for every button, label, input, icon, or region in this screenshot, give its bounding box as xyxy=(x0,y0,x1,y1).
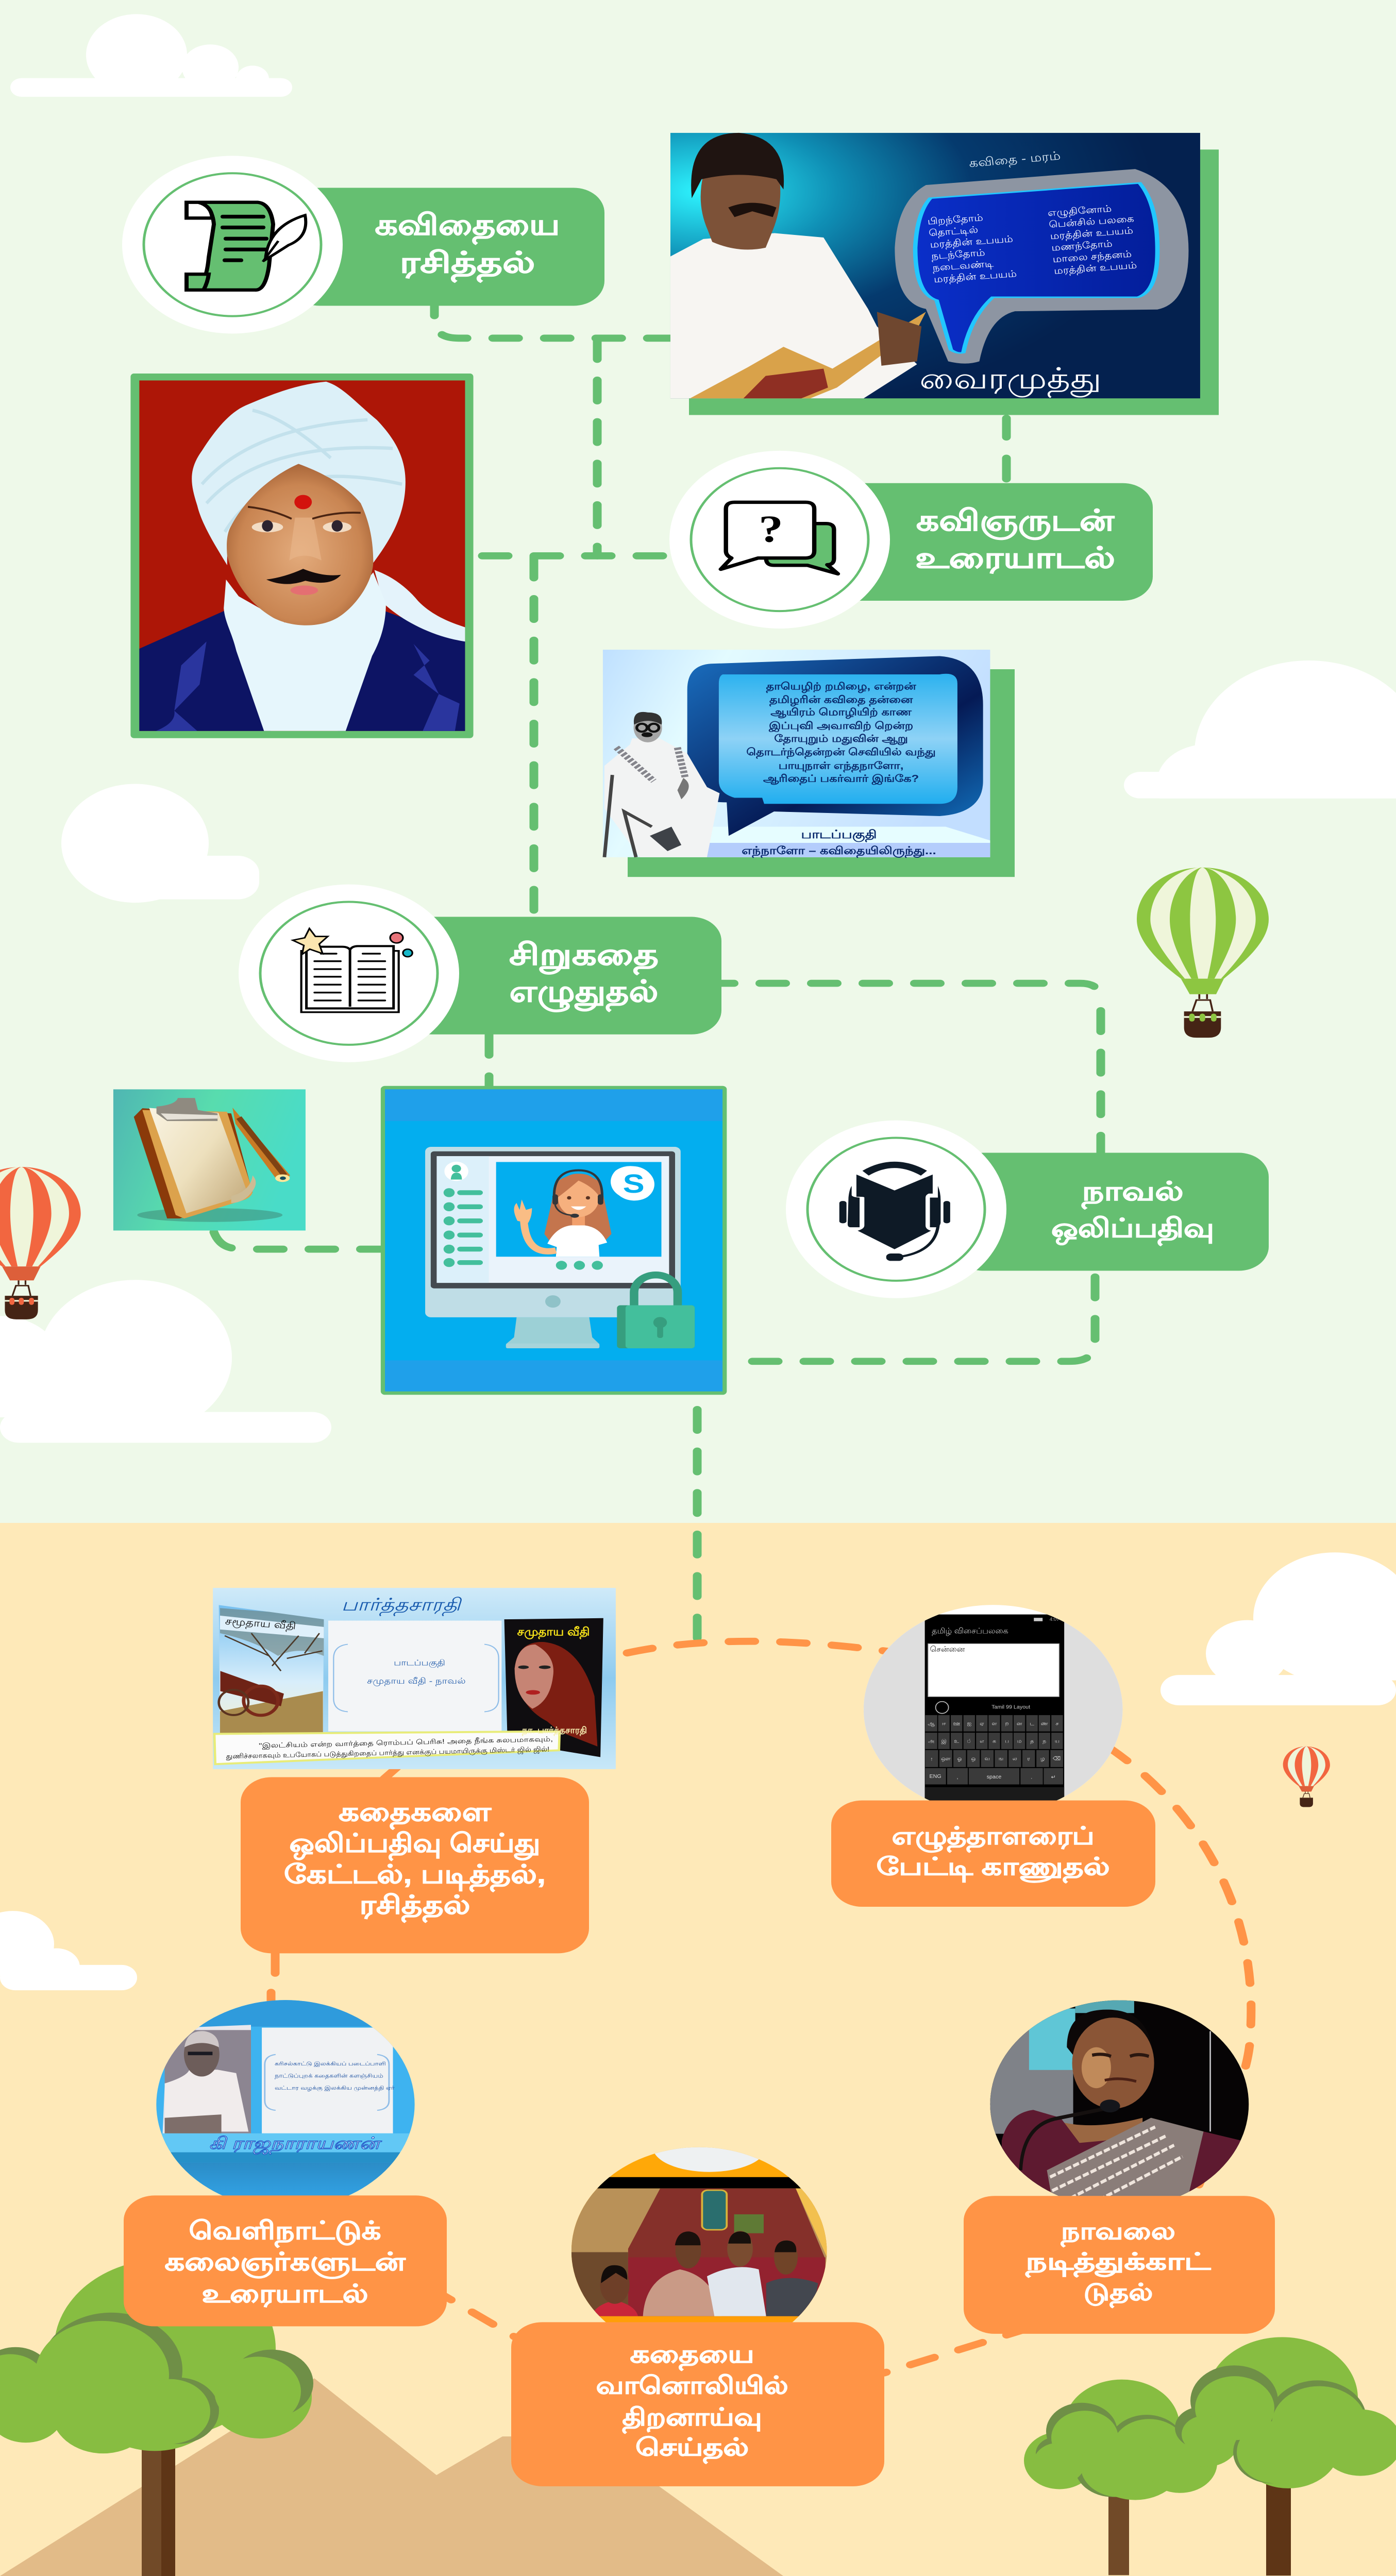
panel: phone with Tamil keyboard: ர xyxy=(1027,1756,1030,1762)
right book cover xyxy=(504,1618,603,1757)
label text: எழுதுதல் xyxy=(509,975,658,1012)
panel: phone with Tamil keyboard: , xyxy=(957,1775,958,1780)
panel: phone with Tamil keyboard: ஔ xyxy=(941,1756,950,1762)
card: act out novel: நாவலை xyxy=(1061,2218,1175,2248)
poem text: ஆரிதைப் பகர்வார் இங்கே? xyxy=(763,773,919,786)
label pill xyxy=(289,188,604,306)
panel: phone with Tamil keyboard: ல xyxy=(1013,1756,1017,1762)
balloon: red left xyxy=(0,1167,81,1319)
card: act out novel: டுதல் xyxy=(1083,2279,1153,2309)
panel: phone with Tamil keyboard: ⌫ xyxy=(1053,1756,1061,1762)
panel: phone with Tamil keyboard: ஆ xyxy=(928,1721,935,1726)
panel: Ki Rajanarayanan circle: வட்டார வழக்கு இலக்கிய முன்னத்தி ஏர் xyxy=(275,2084,395,2091)
card: listen read enjoy: கேட்டல், படித்தல், xyxy=(284,1860,546,1892)
cloud: top left xyxy=(10,14,292,97)
connectors: orange dashed xyxy=(271,1641,1251,2373)
panel: skype computer xyxy=(383,1088,725,1393)
label pill xyxy=(402,917,721,1035)
panel: phone with Tamil keyboard: எ xyxy=(980,1739,984,1744)
label pill xyxy=(773,483,1153,601)
panel: novel Samudaya Veedhi: சமுதாய வீதி xyxy=(517,1626,590,1639)
icon circle xyxy=(669,451,890,629)
node: poem appreciation xyxy=(122,156,604,333)
panel: phone with Tamil keyboard: ன xyxy=(1017,1721,1022,1726)
panel: phone with Tamil keyboard xyxy=(864,1605,1123,1814)
balloon: green xyxy=(1137,868,1269,1038)
panel: phone with Tamil keyboard: சென்னை xyxy=(930,1646,965,1654)
panel: clipboard illustration xyxy=(113,1089,306,1230)
poster texts: மரத்தின் உபயம் xyxy=(1053,260,1137,277)
card: act out novel xyxy=(964,2196,1275,2334)
panel: novel Samudaya Veedhi: பாடப்பகுதி xyxy=(394,1658,445,1668)
panel: phone with Tamil keyboard: ் xyxy=(967,1739,972,1744)
poem text: தமிழரின் கவிதை தன்னை xyxy=(769,694,913,706)
poem text xyxy=(742,681,936,858)
label text: கவிஞருடன் xyxy=(916,504,1115,540)
card: listen read enjoy: கதைகளை xyxy=(339,1798,492,1830)
panel: novel Samudaya Veedhi: "இலட்சியம் என்ற வார்த்தை ரொம்பப் பெரிசு! அதை நீங்க சுலபமாகவும், xyxy=(259,1736,553,1750)
poem text: ஆயிரம் மொழியிற் காண xyxy=(770,706,912,719)
label text xyxy=(375,209,560,283)
poem text: பாயுநாள் எந்தநாளோ, xyxy=(779,760,903,773)
panel: phone with Tamil keyboard: Tamil 99 Layout xyxy=(991,1705,1030,1710)
poster texts: கவிதை - மரம் xyxy=(968,149,1062,171)
panel: phone with Tamil keyboard: அ xyxy=(928,1739,934,1744)
label text: உரையாடல் xyxy=(915,542,1115,574)
poem text: தொடர்ந்தென்றன் செவியில் வந்து xyxy=(746,746,936,759)
poster texts xyxy=(919,149,1140,398)
tree: right small xyxy=(1024,2380,1217,2575)
card: radio review xyxy=(511,2322,884,2486)
panel: phone with Tamil keyboard: ப xyxy=(1005,1739,1009,1744)
poster artwork xyxy=(603,650,990,857)
panel: phone with Tamil keyboard: ↑ xyxy=(930,1757,933,1762)
panel: phone with Tamil keyboard: ச xyxy=(1055,1721,1059,1726)
green shadow xyxy=(628,669,1015,877)
panel: phone with Tamil keyboard: இ xyxy=(941,1739,947,1744)
panel: novel Samudaya Veedhi: சமூதாய வீதி xyxy=(225,1615,297,1633)
panel: phone with Tamil keyboard: ஓ xyxy=(957,1756,962,1762)
panel: phone with Tamil keyboard: ய xyxy=(1055,1739,1059,1744)
panel: Ki Rajanarayanan circle: கரிசல்காட்டு இலக்கியப் படைப்பாளி xyxy=(275,2060,386,2067)
panel: phone with Tamil keyboard: space xyxy=(987,1774,1002,1780)
poster texts: தொட்டில் xyxy=(928,225,979,239)
panel: phone with Tamil keyboard: ENG xyxy=(930,1774,941,1780)
card: radio review: வானொலியில் xyxy=(596,2372,788,2399)
poem text: தோயுறும் மதுவின் ஆறு xyxy=(774,733,908,745)
panel: phone with Tamil keyboard: க xyxy=(993,1739,996,1744)
panel: phone with Tamil keyboard: ந xyxy=(1042,1739,1046,1744)
card: talk with overseas artists: கலைஞர்களுடன் xyxy=(165,2248,406,2279)
panel: phone with Tamil keyboard: தமிழ் விசைப்பலகை xyxy=(932,1627,1008,1635)
label text xyxy=(915,504,1115,574)
panel: phone with Tamil keyboard: ண xyxy=(1041,1721,1048,1726)
panel: phone with Tamil keyboard: ங xyxy=(999,1756,1003,1762)
cloud: lower left xyxy=(0,1280,331,1443)
node: chat with poets xyxy=(669,451,1153,629)
tree: left xyxy=(0,2259,313,2576)
video call: woman with headset: S xyxy=(623,1170,645,1198)
label text: ரசித்தல் xyxy=(399,246,535,283)
poster texts: மரத்தின் உபயம் xyxy=(933,269,1017,285)
label text xyxy=(509,938,659,1012)
node: short story writing xyxy=(239,885,721,1062)
card: listen read enjoy xyxy=(241,1777,589,1953)
card: radio review: கதையை xyxy=(630,2341,754,2371)
panel: phone with Tamil keyboard: த xyxy=(1030,1739,1034,1744)
node: novel audio recording xyxy=(786,1121,1269,1298)
panel: phone with Tamil keyboard: ↵ xyxy=(1051,1775,1056,1780)
poem text: எந்நாளோ – கவிதையிலிருந்து... xyxy=(742,845,936,858)
card: act out novel: நடித்துக்காட் xyxy=(1025,2248,1211,2278)
photo panel: Vairamuthu xyxy=(670,133,1219,415)
panel: phone with Tamil keyboard: ஈ xyxy=(942,1721,946,1726)
label text: நாவல் xyxy=(1081,1177,1183,1210)
poster artwork xyxy=(670,133,1200,398)
poster texts: நடந்தோம் xyxy=(931,248,986,262)
label text: சிறுகதை xyxy=(509,938,659,975)
panel: phone with Tamil keyboard: ஒ xyxy=(971,1756,975,1762)
label text: ஒலிப்பதிவு xyxy=(1051,1214,1214,1247)
panel: phone with Tamil keyboard: . xyxy=(1031,1775,1032,1780)
icon circle xyxy=(122,156,343,333)
cloud: cream left xyxy=(0,1911,137,1990)
card: radio review: செய்தல் xyxy=(635,2434,749,2464)
tree: right large xyxy=(1172,2337,1396,2575)
panel: writer portrait photo xyxy=(989,1999,1250,2211)
panel: phone with Tamil keyboard: ஊ xyxy=(953,1721,960,1726)
label text: கவிதையை xyxy=(375,209,560,245)
panel: radio studio photo xyxy=(571,2147,827,2323)
balloon: small red xyxy=(1283,1747,1330,1807)
panel: phone with Tamil keyboard: 4:07 xyxy=(1050,1617,1059,1622)
poster texts: மணந்தோம் xyxy=(1051,239,1113,253)
panel: phone with Tamil keyboard: ற xyxy=(1005,1721,1009,1726)
icon: chat bubbles with question mark: ? xyxy=(759,509,783,550)
icon circle xyxy=(239,885,459,1062)
card: listen read enjoy: ரசித்தல் xyxy=(360,1890,470,1923)
card: interview writers: பேட்டி காணுதல் xyxy=(876,1853,1109,1884)
panel: Ki Rajanarayanan circle: கி ராஜநாராயணன் xyxy=(209,2134,382,2155)
panel: novel Samudaya Veedhi: பார்த்தசாரதி xyxy=(341,1595,463,1617)
photo panel: Bharathi portrait xyxy=(130,374,474,738)
panel: phone with Tamil keyboard: உ xyxy=(954,1739,959,1744)
photo panel: Kannadasan poem xyxy=(603,650,1015,877)
people xyxy=(591,2231,818,2316)
connectors: green dashed xyxy=(214,295,1101,1645)
poster texts: பிறந்தோம் xyxy=(927,213,984,227)
cloud: cream right xyxy=(1160,1552,1396,1705)
poster texts: மரத்தின் உபயம் xyxy=(930,234,1014,250)
monitor xyxy=(425,1147,681,1348)
cloud: right middle xyxy=(1124,660,1396,799)
poster texts: வைரமுத்து xyxy=(919,362,1102,398)
poster texts: எழுதினோம் xyxy=(1047,204,1112,219)
poem text: தாயெழிற் றமிழை, என்றன் xyxy=(766,681,916,693)
card: radio review: திறனாய்வு xyxy=(622,2404,762,2434)
panel: phone with Tamil keyboard: ம xyxy=(1017,1739,1021,1744)
background: green sky xyxy=(0,0,1396,1523)
poster texts: மரத்தின் உபயம் xyxy=(1050,226,1134,242)
card: talk with overseas artists xyxy=(124,2195,447,2326)
panel: Ki Rajanarayanan circle: நாட்டுப்புறக் கதைகளின் களஞ்சியம் xyxy=(275,2073,383,2079)
card: listen read enjoy: ஒலிப்பதிவு செய்து xyxy=(289,1828,540,1861)
label text xyxy=(1051,1177,1214,1247)
panel: novel Samudaya Veedhi: துணிச்சலாகவும் உபயோகப் படுத்துகிறதைப் பார்த்து எனக்குப் பயமாயிருக்கு மிஸ்டர் ஜில் ஜில்! xyxy=(226,1746,549,1761)
cloud: left blob xyxy=(61,784,259,903)
icon: chat bubbles with question mark xyxy=(721,502,838,574)
panel: Ki Rajanarayanan circle xyxy=(156,2000,415,2196)
card: talk with overseas artists: வெளிநாட்டுக் xyxy=(189,2217,381,2248)
panel: phone with Tamil keyboard: ஐ xyxy=(967,1721,971,1726)
icon: scroll and quill xyxy=(187,202,306,290)
panel: phone with Tamil keyboard: ஏ xyxy=(980,1721,984,1726)
poster texts: பென்சில் பலகை xyxy=(1048,214,1135,230)
label pill xyxy=(953,1153,1269,1271)
poster texts: மாலை சந்தனம் xyxy=(1052,249,1132,265)
card: interview writers: எழுத்தாளரைப் xyxy=(892,1823,1094,1853)
mountains xyxy=(0,2378,783,2576)
poem text: இப்புவி அவாவிற் றென்ற xyxy=(768,720,913,732)
background: cream sky xyxy=(0,1523,1396,2576)
poem text: பாடப்பகுதி xyxy=(801,828,877,842)
panel: novel Samudaya Veedhi: நா. பார்த்தசாரதி xyxy=(522,1726,587,1736)
icon: book with headset xyxy=(839,1165,950,1261)
card: interview writers xyxy=(831,1801,1155,1907)
panel: phone with Tamil keyboard: ள xyxy=(992,1721,997,1726)
panel: phone with Tamil keyboard: ழ xyxy=(1040,1756,1045,1762)
icon: open book with star xyxy=(293,928,412,1012)
panel: phone with Tamil keyboard: வ xyxy=(984,1756,990,1762)
padlock xyxy=(617,1275,695,1348)
video call: woman with headset xyxy=(496,1162,662,1257)
left book cover xyxy=(219,1605,324,1734)
panel: phone with Tamil keyboard: ட xyxy=(1030,1721,1034,1726)
icon circle xyxy=(786,1121,1006,1298)
card: talk with overseas artists: உரையாடல் xyxy=(202,2280,368,2308)
green shadow xyxy=(689,149,1219,415)
poster texts: நடைவண்டி xyxy=(932,259,994,274)
panel: novel Samudaya Veedhi xyxy=(213,1588,616,1769)
panel: novel Samudaya Veedhi: சமுதாய வீதி - நாவல் xyxy=(367,1676,466,1686)
